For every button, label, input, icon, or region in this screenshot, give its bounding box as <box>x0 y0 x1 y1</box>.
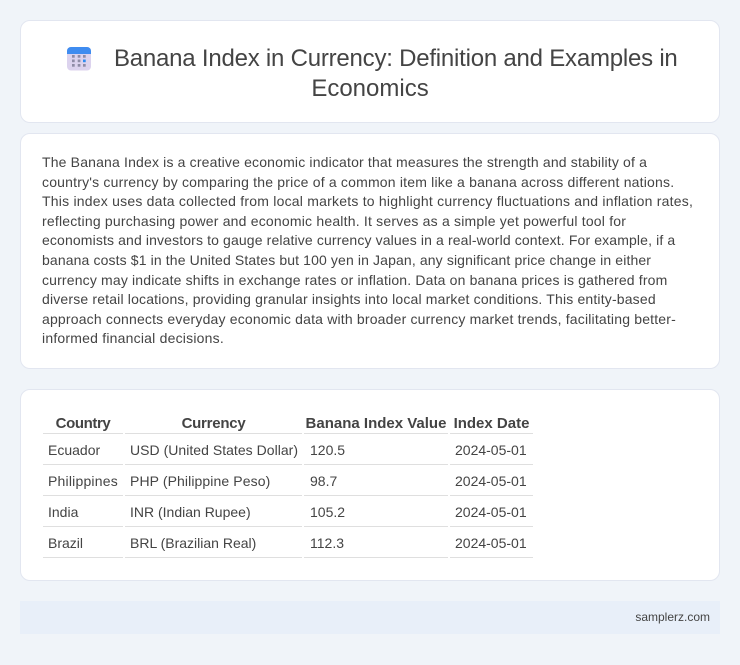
text block: description paragraph <box>42 154 693 346</box>
text block: description paragraph: This index uses data collected from local markets to highlight currency fluctuations and inflation rates, <box>42 193 693 209</box>
row: Philippines: Philippines <box>48 473 118 489</box>
row: Brazil <box>48 535 527 551</box>
row: Ecuador: USD (United States Dollar) <box>130 442 298 458</box>
table header <box>56 415 529 432</box>
table header: Country <box>56 415 110 432</box>
text block: description paragraph: country's currency by comparing the price of a common item like a banana across different nations. <box>42 174 674 190</box>
footer text: samplerz.com <box>635 610 710 624</box>
text block: description paragraph: informed financial decisions. <box>42 330 224 346</box>
row: Ecuador: 2024-05-01 <box>455 442 527 458</box>
text block: description paragraph: banana costs $1 in the United States but 100 yen in Japan, any significant price change in either <box>42 252 651 268</box>
row: India: India <box>48 504 78 520</box>
row: Brazil: 2024-05-01 <box>455 535 527 551</box>
title <box>114 45 678 102</box>
table header: Currency <box>182 415 245 432</box>
table: banana index values <box>43 415 533 558</box>
row: Philippines: 2024-05-01 <box>455 473 527 489</box>
title: Banana Index in Currency: Definition and Examples in <box>114 45 678 72</box>
panel: description <box>20 133 720 369</box>
icon: calendar <box>67 47 91 70</box>
row: Brazil: BRL (Brazilian Real) <box>130 535 256 551</box>
footer bar <box>20 601 720 634</box>
text block: description paragraph: diverse retail locations, providing granular insights into local market conditions. This entity-based <box>42 291 656 307</box>
text block: description paragraph: approach connects everyday economic data with broader currency market trends, facilitating better- <box>42 311 676 327</box>
text block: description paragraph: currency may indicate shifts in exchange rates or inflation. Data on banana prices is gathered from <box>42 272 667 288</box>
row: Ecuador: 120.5 <box>310 442 345 458</box>
table header: Banana Index Value <box>306 415 446 432</box>
text block: description paragraph: The Banana Index is a creative economic indicator that measures the strength and stability of a <box>42 154 647 170</box>
text block: description paragraph: reflecting purchasing power and economic health. It serves as a simple yet powerful tool for <box>42 213 626 229</box>
row: Brazil: 112.3 <box>310 535 344 551</box>
row: India: INR (Indian Rupee) <box>130 504 251 520</box>
row: Ecuador <box>48 442 527 458</box>
row: India: 105.2 <box>310 504 345 520</box>
row: Brazil: Brazil <box>48 535 83 551</box>
title: Economics <box>311 75 429 102</box>
table header: Index Date <box>454 415 529 432</box>
row: Ecuador: Ecuador <box>48 442 100 458</box>
panel: title card <box>20 20 720 123</box>
panel: table card <box>20 389 720 581</box>
text block: description paragraph: economists and investors to gauge relative currency values in a real-world context. For example, if a <box>42 232 675 248</box>
row: India <box>48 504 527 520</box>
row: Philippines <box>48 473 527 489</box>
row: Philippines: 98.7 <box>310 473 337 489</box>
row: Philippines: PHP (Philippine Peso) <box>130 473 270 489</box>
row: India: 2024-05-01 <box>455 504 527 520</box>
